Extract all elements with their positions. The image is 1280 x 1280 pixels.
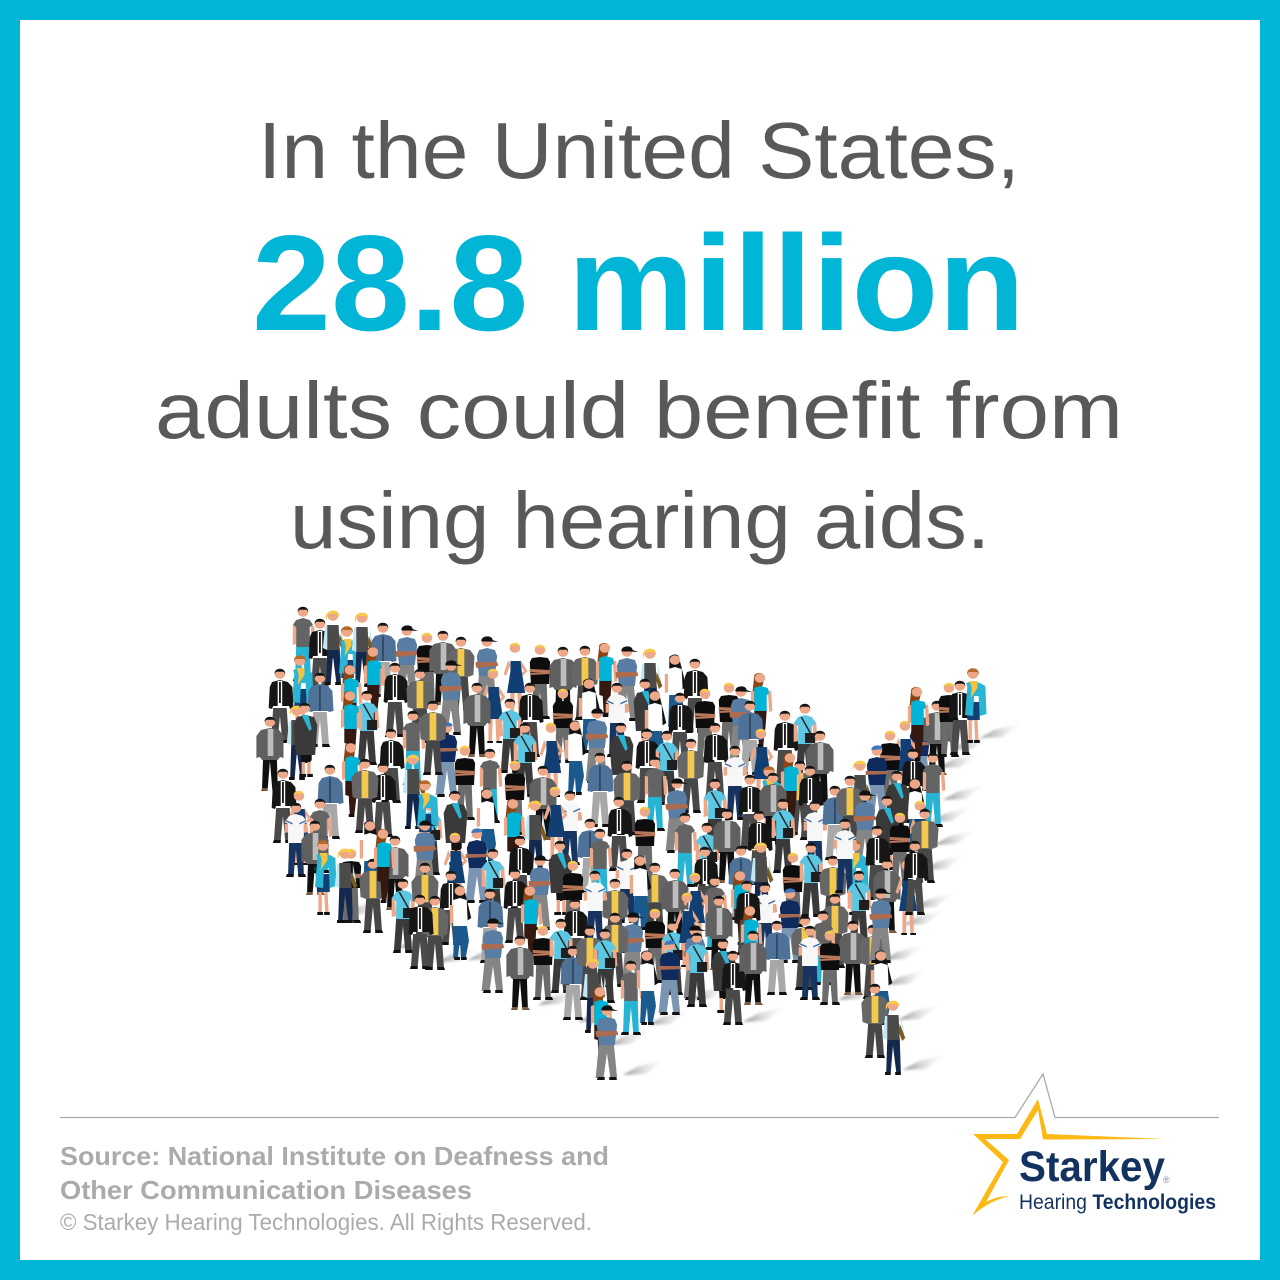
- logo wordmark: Starkey: [1019, 1143, 1165, 1191]
- footer rule with star outline: [60, 1074, 1219, 1118]
- icon: yellow star swoosh: [972, 1099, 1165, 1216]
- ground shadows of the crowd: [343, 721, 1026, 1075]
- source note: Source: National Institute on Deafness and: [60, 1141, 609, 1171]
- logo registered mark: ®: [1163, 1175, 1170, 1185]
- Starkey Hearing Technologies logo: [972, 1099, 1216, 1216]
- headline number: 28.8 million: [252, 207, 1025, 359]
- heading: closing text: using hearing aids.: [290, 476, 990, 565]
- source note: Other Communication Diseases: [60, 1175, 472, 1205]
- heading: closing text: [155, 366, 1123, 565]
- source note: [60, 1141, 609, 1235]
- heading: intro line: In the United States,: [258, 106, 1020, 195]
- logo tagline: Hearing Technologies: [1019, 1191, 1216, 1214]
- heading: closing text: adults could benefit from: [155, 366, 1123, 455]
- illustration: crowd of people forming a map of the United States: [256, 607, 1026, 1080]
- source note: © Starkey Hearing Technologies. All Rights Reserved.: [60, 1209, 592, 1235]
